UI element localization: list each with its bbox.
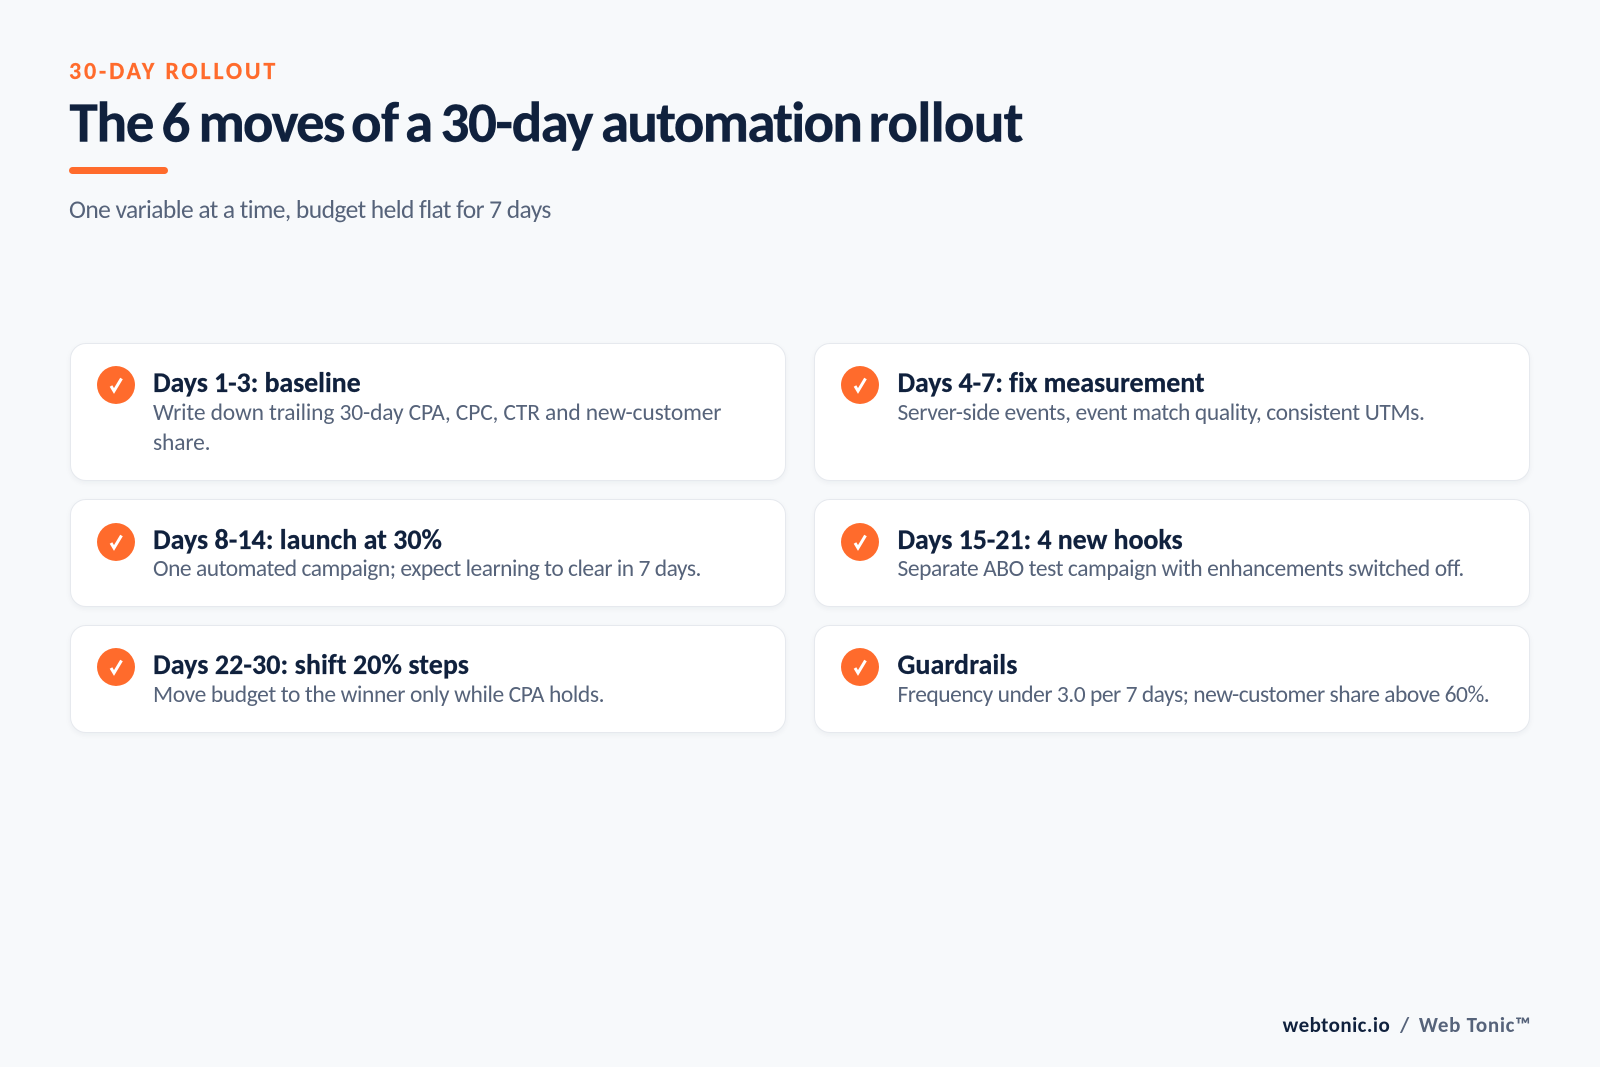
card: days 1-3 — [70, 343, 786, 481]
icon: check — [841, 523, 879, 561]
subtitle: One variable at a time, budget held flat for 7 days — [69, 194, 551, 225]
icon: check — [97, 648, 135, 686]
heading: Days 4-7: fix measurement — [898, 365, 1204, 400]
heading: Days 1-3: baseline — [153, 365, 361, 400]
title: a — [405, 89, 433, 158]
title: 30-day — [440, 89, 594, 158]
footer: webtonic.io / Web Tonic™ — [1283, 1012, 1531, 1038]
heading: Guardrails — [898, 647, 1017, 682]
card: days 8-14 — [70, 499, 786, 607]
title — [70, 89, 1024, 158]
card: guardrails — [814, 625, 1530, 733]
card: days 15-21 — [814, 499, 1530, 607]
icon: check — [841, 648, 879, 686]
card: days 4-7 — [814, 343, 1530, 481]
description: Frequency under 3.0 per 7 days; new-customer share above 60%. — [898, 681, 1489, 709]
title: The — [70, 89, 154, 158]
icon: check — [97, 523, 135, 561]
title: rollout — [868, 89, 1024, 158]
description: Separate ABO test campaign with enhancements switched off. — [898, 555, 1464, 583]
icon: check — [841, 366, 879, 404]
accent rule — [69, 166, 168, 174]
icon: check — [97, 366, 135, 404]
title: of — [351, 89, 399, 158]
heading: Days 22-30: shift 20% steps — [153, 647, 469, 682]
heading: Days 8-14: launch at 30% — [153, 522, 442, 557]
heading: Days 15-21: 4 new hooks — [898, 522, 1183, 557]
title: 6 — [162, 89, 190, 158]
description: Write down trailing 30-day CPA, CPC, CTR and new-customer share. — [153, 399, 721, 456]
eyebrow: 30-DAY ROLLOUT — [69, 57, 278, 86]
title: moves — [198, 89, 346, 158]
card: days 22-30 — [70, 625, 786, 733]
title: automation — [601, 89, 863, 158]
description: Server-side events, event match quality, consistent UTMs. — [898, 399, 1425, 427]
description: Move budget to the winner only while CPA holds. — [153, 681, 604, 709]
description: One automated campaign; expect learning to clear in 7 days. — [153, 555, 701, 583]
